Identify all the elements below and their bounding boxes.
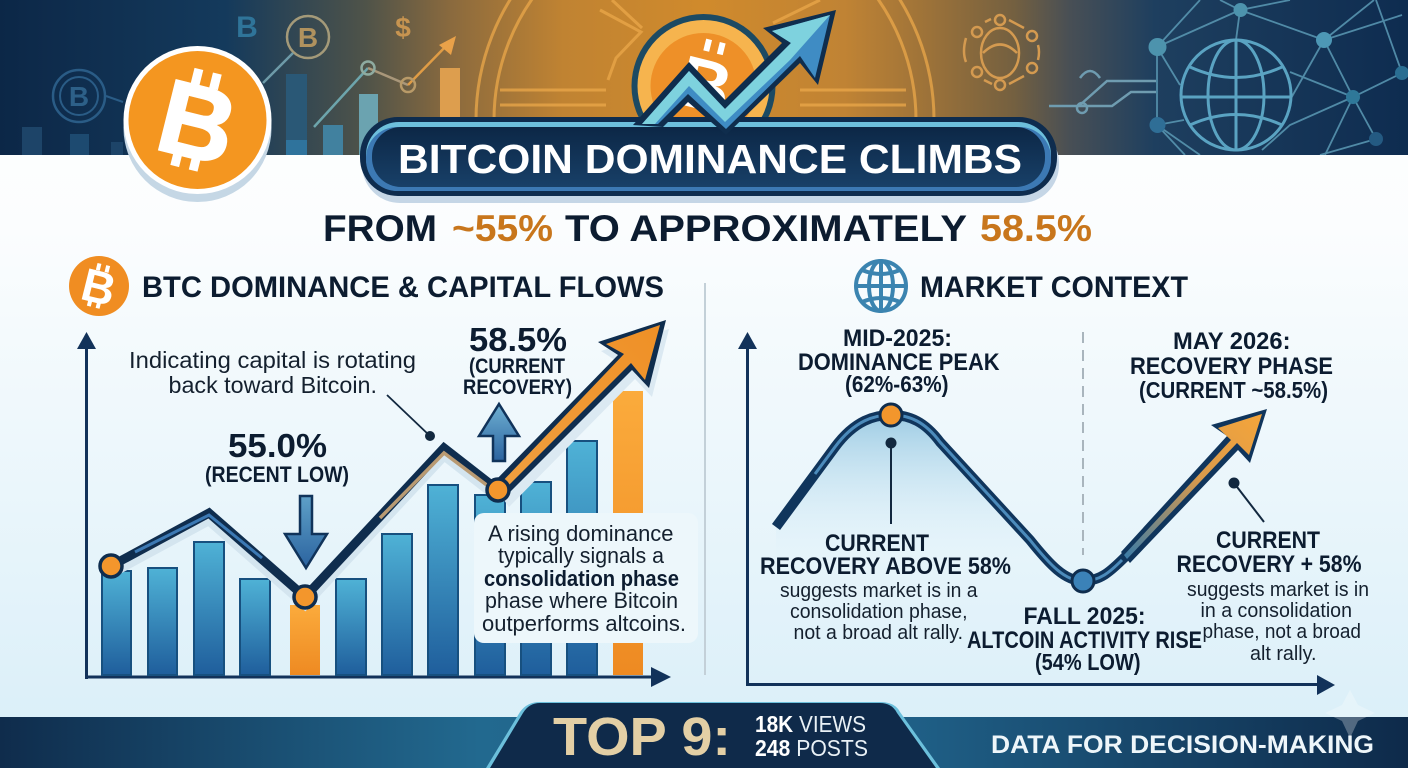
- label: altcoin activity: FALL 2025:: [1024, 603, 1146, 630]
- peak marker: [880, 404, 902, 426]
- trough marker: [1072, 570, 1094, 592]
- label: dominance peak: DOMINANCE PEAK: [798, 349, 1000, 376]
- note: recovery above 58%: consolidation phase,: [790, 601, 968, 623]
- title banner: [360, 10, 1059, 203]
- note: recovery + 58%: alt rally.: [1250, 643, 1316, 665]
- subtitle: 58.5%: [980, 208, 1092, 249]
- subtitle: FROM: [323, 208, 437, 249]
- data points: [100, 479, 509, 608]
- rising arrow over coin: [633, 10, 836, 135]
- bar chart: [102, 391, 643, 675]
- globe: [1181, 40, 1291, 150]
- circuit lines: [1049, 71, 1156, 113]
- callout: rising dominance: [474, 513, 698, 643]
- header banner: [0, 0, 1408, 155]
- central bitcoin coin: [632, 14, 776, 117]
- icon: globe: [856, 261, 906, 311]
- chart axes: [77, 332, 671, 687]
- callout: rising dominance: phase where Bitcoin: [485, 588, 678, 613]
- peak leader: [886, 438, 896, 524]
- subtitle: ~55%: [452, 208, 553, 249]
- label: current recovery: [463, 321, 572, 399]
- icon: bitcoin: B: [76, 258, 121, 316]
- label: recovery phase: [1130, 328, 1333, 403]
- callout: capital rotation: back toward Bitcoin.: [168, 372, 377, 398]
- line series: [111, 448, 498, 603]
- label: current recovery: (CURRENT: [469, 355, 565, 378]
- note: recovery + 58%: in a consolidation: [1200, 600, 1352, 622]
- label: altcoin activity: [967, 603, 1202, 675]
- panel: BTC dominance chart: [77, 320, 698, 687]
- chart axes: [738, 332, 1335, 695]
- label: altcoin activity: ALTCOIN ACTIVITY RISE: [967, 627, 1202, 654]
- network mesh: [1157, 0, 1402, 155]
- faint bitcoin coins and symbols: B: [298, 22, 318, 53]
- faint bitcoin coins and symbols: [53, 11, 411, 122]
- callout: capital rotation: [129, 347, 435, 441]
- footer stat: posts: 248 POSTS: [755, 735, 868, 761]
- subtitle: TO APPROXIMATELY: [565, 208, 967, 249]
- note: recovery above 58%: RECOVERY ABOVE 58%: [760, 553, 1011, 580]
- footer tab: [486, 702, 940, 768]
- icon: up arrow: [479, 404, 519, 461]
- large bitcoin badge: [124, 46, 272, 202]
- panel: market context chart: [738, 325, 1369, 695]
- icon: sparkle: [1325, 690, 1375, 738]
- vault circle backdrop: [474, 0, 936, 117]
- label: recovery phase: MAY 2026:: [1173, 328, 1290, 355]
- note: recovery above 58%: CURRENT: [825, 530, 929, 557]
- orange network icon: [964, 15, 1039, 90]
- title text: BITCOIN DOMINANCE CLIMBS: [398, 136, 1022, 182]
- section heading: BTC dominance: [69, 256, 664, 316]
- recovery leader: [1228, 478, 1264, 522]
- section heading: BTC dominance: BTC DOMINANCE & CAPITAL FLOWS: [142, 271, 664, 304]
- subtitle: [323, 208, 1092, 249]
- label: recent low: [205, 427, 349, 487]
- faint bitcoin coins and symbols: B: [236, 11, 258, 44]
- note: recovery + 58%: RECOVERY + 58%: [1176, 551, 1362, 578]
- note: recovery + 58%: [1176, 527, 1369, 665]
- faint bitcoin coins and symbols: B: [69, 81, 89, 112]
- note: recovery + 58%: phase, not a broad: [1202, 621, 1361, 643]
- recovery arrow: [492, 320, 669, 507]
- callout: capital rotation: Indicating capital is rotating: [129, 347, 416, 373]
- label: recent low: 55.0%: [228, 427, 327, 464]
- label: current recovery: RECOVERY): [463, 376, 572, 399]
- footer stat: views: 18K VIEWS: [755, 711, 866, 737]
- icon: down arrow: [285, 496, 327, 568]
- dominance curve: [776, 415, 1126, 581]
- large bitcoin badge: B: [147, 58, 248, 189]
- label: dominance peak: (62%-63%): [845, 371, 948, 397]
- callout: rising dominance: consolidation phase: [484, 566, 679, 591]
- faint bitcoin coins and symbols: $: [395, 12, 411, 43]
- label: recent low: (RECENT LOW): [205, 462, 349, 487]
- label: dominance peak: MID-2025:: [843, 325, 952, 352]
- background bars: [22, 68, 460, 155]
- label: recovery phase: RECOVERY PHASE: [1130, 353, 1333, 380]
- note: recovery above 58%: not a broad alt rally.: [794, 622, 963, 644]
- label: dominance peak: [798, 325, 1000, 397]
- callout: rising dominance: A rising dominance: [488, 521, 674, 546]
- section heading: market context: [856, 261, 1188, 311]
- background trend arrow: [314, 36, 456, 127]
- label: recovery phase: (CURRENT ~58.5%): [1139, 377, 1328, 403]
- callout: rising dominance: typically signals a: [498, 543, 665, 568]
- section heading: market context: MARKET CONTEXT: [920, 271, 1188, 304]
- callout: rising dominance: outperforms altcoins.: [482, 611, 686, 636]
- recovery arrow: [1121, 409, 1267, 563]
- central bitcoin coin: B: [670, 41, 740, 131]
- footer band: [0, 702, 1408, 768]
- area under curve: [776, 415, 1030, 560]
- network nodes: [1148, 3, 1408, 146]
- note: recovery above 58%: suggests market is in a: [780, 580, 978, 602]
- note: recovery + 58%: suggests market is in: [1187, 579, 1369, 601]
- label: altcoin activity: (54% LOW): [1035, 649, 1140, 675]
- label: current recovery: 58.5%: [469, 321, 567, 358]
- note: recovery above 58%: [760, 530, 1011, 644]
- footer tagline: DATA FOR DECISION-MAKING: [991, 731, 1374, 759]
- footer stat: top 9: TOP 9:: [553, 707, 731, 767]
- note: recovery + 58%: CURRENT: [1216, 527, 1320, 554]
